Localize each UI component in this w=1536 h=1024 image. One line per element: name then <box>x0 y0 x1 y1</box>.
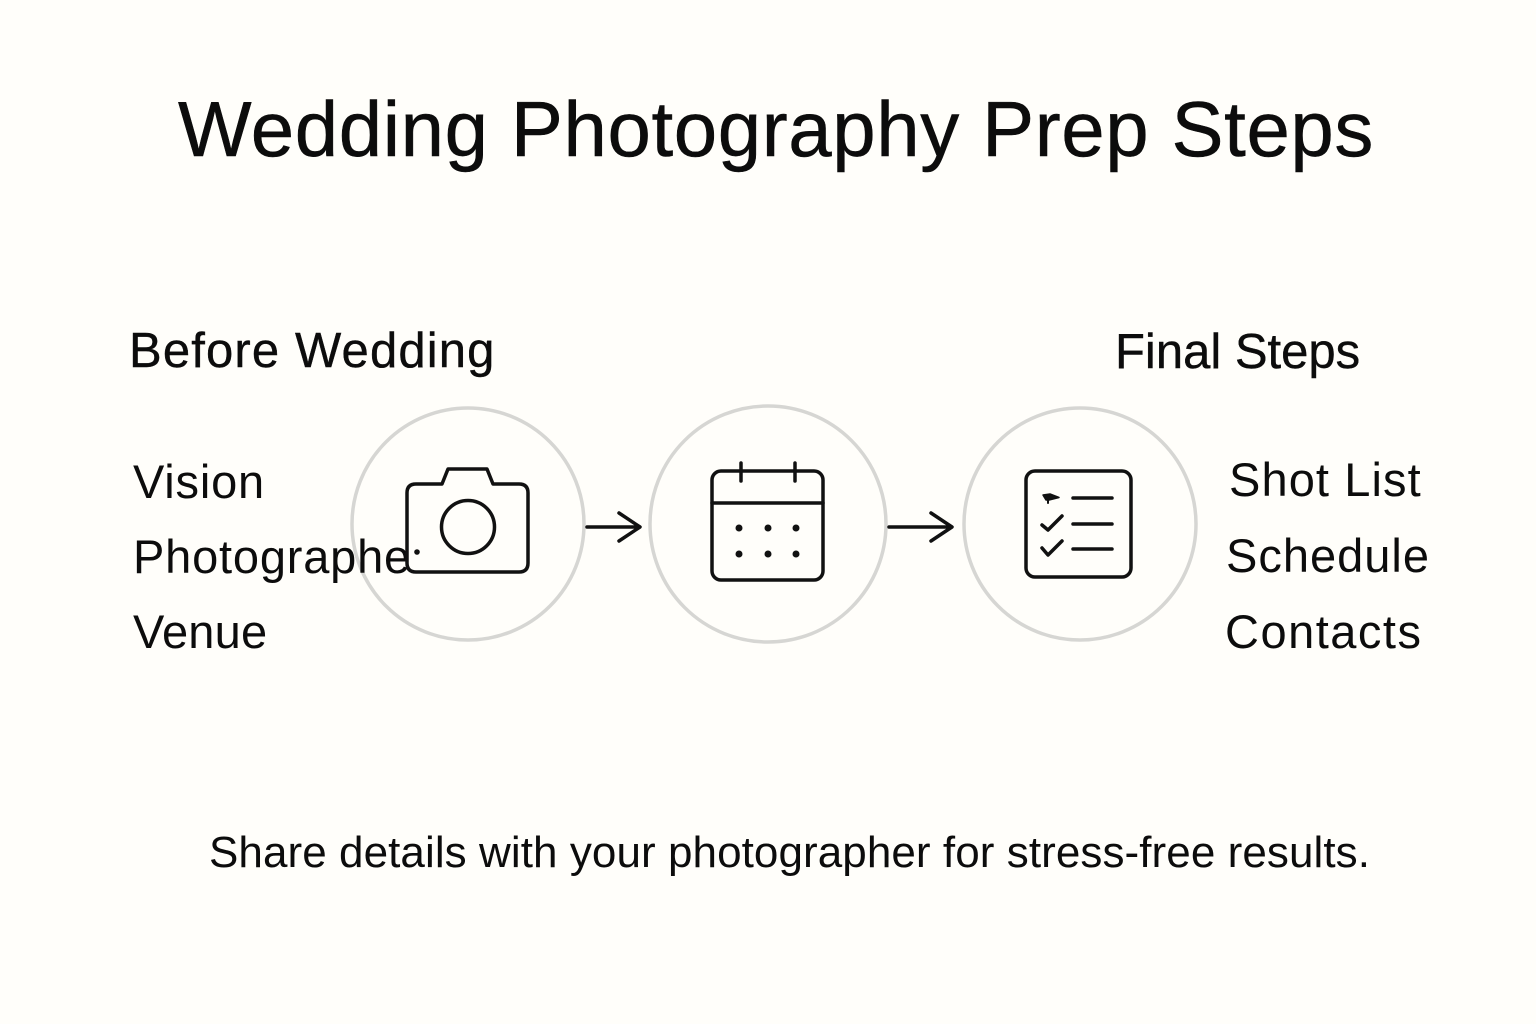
list: before wedding items: Vision <box>133 455 265 508</box>
list: final steps items: Shot List <box>1229 453 1422 506</box>
list: final steps items <box>1225 453 1430 658</box>
arrow: step 1 to step 2 <box>587 513 640 541</box>
heading: before wedding: Before Wedding <box>129 324 496 378</box>
arrow: step 2 to step 3 <box>889 513 952 541</box>
icon: camera <box>407 469 528 572</box>
list: before wedding items: Venue <box>133 605 267 658</box>
icon: checklist <box>1026 471 1131 577</box>
list: before wedding items <box>133 455 427 658</box>
circle: step 3 <box>964 408 1196 640</box>
list: before wedding items: Photographer <box>133 530 427 583</box>
icon: calendar <box>712 463 823 580</box>
list: final steps items: Contacts <box>1225 605 1422 658</box>
footer note: Share details with your photographer for stress-free results. <box>209 828 1370 877</box>
title: Wedding Photography Prep Steps <box>178 85 1374 173</box>
circle: step 2 <box>650 406 886 642</box>
heading: final steps: Final Steps <box>1115 325 1360 379</box>
list: final steps items: Schedule <box>1226 529 1430 582</box>
